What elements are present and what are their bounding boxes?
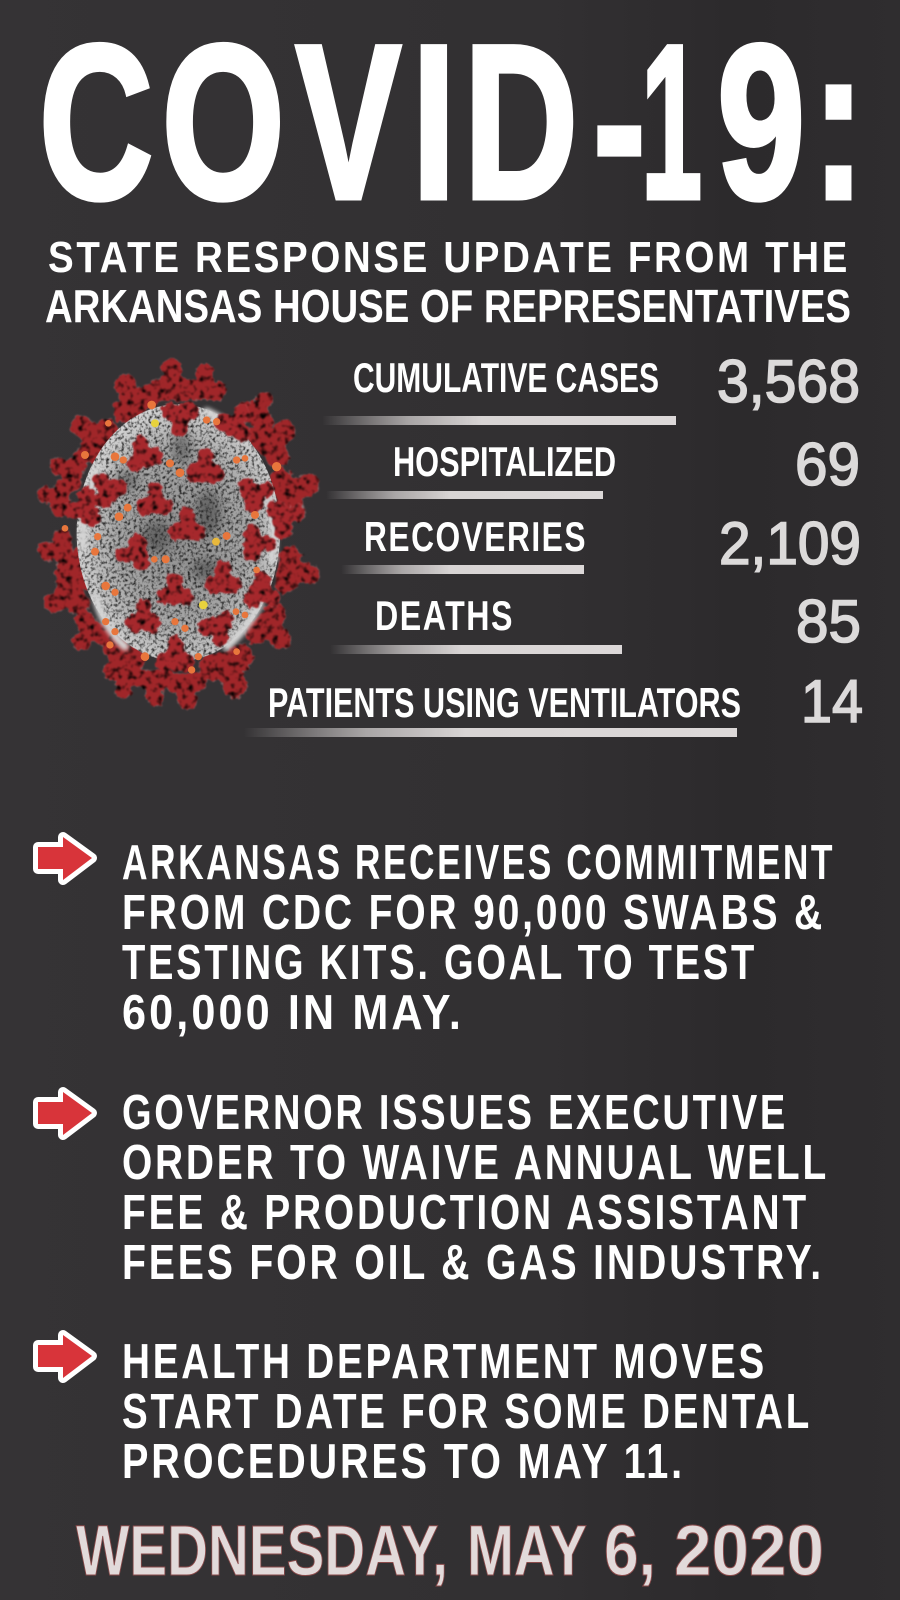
date: MAY [467,1512,587,1591]
stat: cumulative cases [322,348,860,425]
stat: recoveries: RECOVERIES [364,513,587,560]
date: 2020 [674,1512,824,1591]
stat: patients using ventilators: 14 [801,668,863,735]
title: 1 [641,0,702,245]
news item 2 [38,1086,829,1290]
stat: hospitalized [326,431,860,499]
stat: hospitalized: 69 [795,431,860,498]
icon: red arrow [38,837,92,880]
stat: deaths [330,588,861,655]
bright rim [83,412,274,647]
date [76,1512,824,1591]
stat: deaths: DEATHS [375,592,514,639]
text: CDC swabs [122,836,835,1040]
icon: red arrow [38,1335,92,1378]
text: dental procedures [122,1335,812,1489]
title: 9: [717,0,865,245]
stat: patients using ventilators: PATIENTS USING VENTILATORS [268,679,741,726]
stat: recoveries: 2,109 [719,510,861,577]
dark surface patches [115,430,222,582]
title: COVID- [39,0,646,245]
icon: red arrow [38,1092,92,1135]
virus body [77,404,280,661]
news item 3 [38,1335,812,1489]
stat: patients using ventilators [243,668,863,737]
stats [243,348,863,737]
date: WEDNESDAY, [76,1512,448,1591]
text: dental procedures: PROCEDURES TO MAY 11. [122,1435,685,1489]
text: CDC swabs: 60,000 IN MAY. [122,986,464,1040]
stat: cumulative cases: CUMULATIVE CASES [353,354,659,401]
news item 1 [38,836,835,1040]
orange and yellow proteins [62,401,281,674]
stat: deaths: 85 [796,588,861,655]
date: 6, [604,1512,656,1591]
text: executive order [122,1086,829,1290]
outer spikes [34,358,327,712]
stat: recoveries [341,510,861,577]
stat: hospitalized: HOSPITALIZED [393,438,616,485]
icon: coronavirus illustration [34,358,327,712]
stat: cumulative cases: 3,568 [717,348,860,415]
inner spikes [59,396,312,672]
subtitle [45,233,851,332]
